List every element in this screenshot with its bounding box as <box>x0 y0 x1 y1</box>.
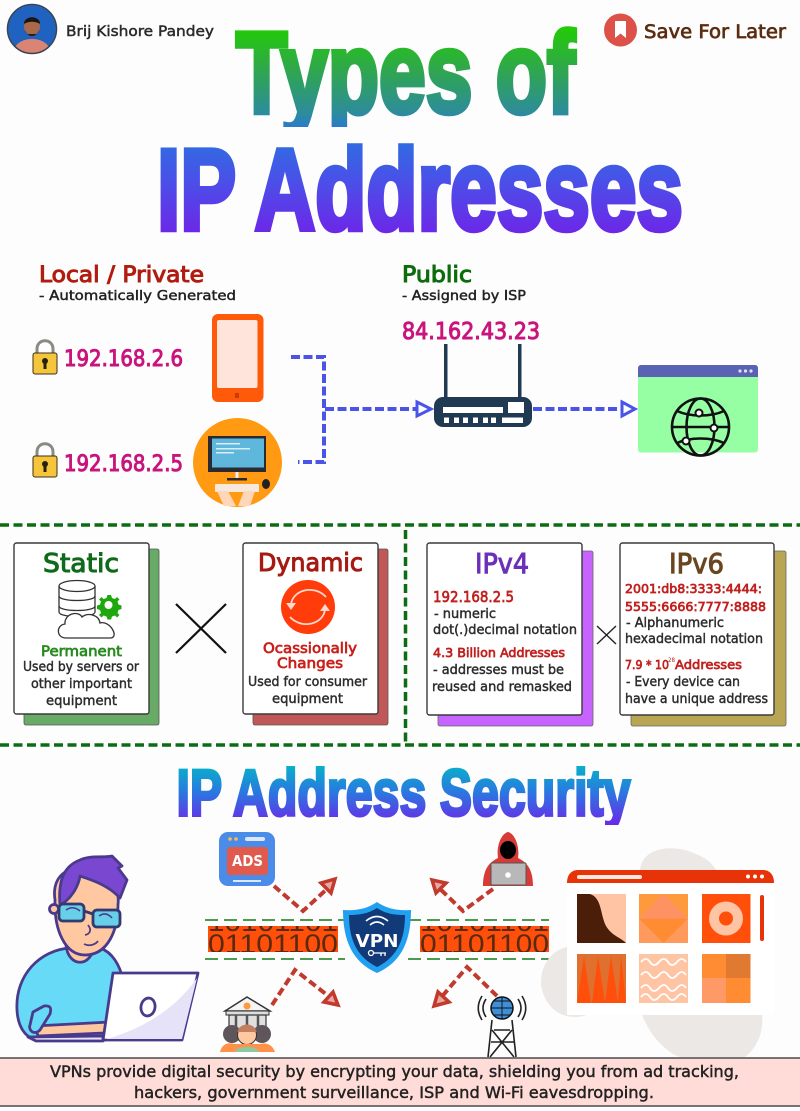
icon: lock two <box>33 444 57 477</box>
illustration: person with laptop <box>17 856 198 1041</box>
ipv6 count <box>625 657 742 672</box>
caption text: hackers, government surveillance, ISP and Wi-Fi eavesdropping. <box>134 1083 654 1102</box>
dynamic description: Used for consumer <box>248 675 368 690</box>
panel: static card <box>14 543 159 725</box>
icon: router <box>434 344 532 427</box>
dynamic description: equipment <box>272 692 343 707</box>
ipv6 note <box>625 675 768 707</box>
ipv6 example <box>625 581 766 614</box>
encrypted data stream left: 10101101 <box>208 907 338 937</box>
author avatar <box>8 5 56 53</box>
encrypted data stream right: 10101101 <box>420 907 549 937</box>
arrow: router to internet <box>533 407 620 411</box>
ipv6 example: 2001:db8:3333:4444: <box>625 581 762 596</box>
save icon <box>604 14 637 46</box>
ipv4 note: - addresses must be <box>433 663 564 678</box>
thumbnail: target <box>702 894 750 943</box>
main title <box>160 26 682 234</box>
avatar ring <box>8 4 56 54</box>
ipv6 count: 28 <box>668 657 675 664</box>
caption band <box>0 1058 800 1106</box>
panel: ipv6 card <box>620 543 786 726</box>
ipv4 count: 4.3 Billion Addresses <box>433 645 565 660</box>
local private note: - Automatically Generated <box>39 288 236 304</box>
icon: phone <box>212 314 264 402</box>
static heading: Static <box>43 549 119 579</box>
ipv4 notation: - numeric <box>434 607 496 622</box>
ipv6 notation <box>625 616 763 647</box>
author name: Brij Kishore Pandey <box>66 24 214 40</box>
encrypted data stream right: 01101100 <box>420 929 549 959</box>
caption text <box>50 1062 739 1102</box>
ipv6 note: have a unique address <box>625 692 768 707</box>
arrow: ads deflected <box>274 879 335 911</box>
permanent label: Permanent <box>41 644 123 660</box>
panel: dynamic card <box>243 543 388 725</box>
local private heading: Local / Private <box>39 263 204 288</box>
arrow: tower deflected <box>434 967 497 1006</box>
static description <box>23 660 140 709</box>
icon: vpn shield: VPN <box>356 931 398 952</box>
caption text: VPNs provide digital security by encrypting your data, shielding you from ad tracking, <box>50 1062 739 1081</box>
dynamic heading: Dynamic <box>258 548 363 577</box>
ipv6 notation: hexadecimal notation <box>625 632 763 647</box>
ipv6 notation: - Alphanumeric <box>626 616 724 631</box>
ipv6 heading: IPv6 <box>669 547 724 580</box>
panel: local private vs public <box>33 263 758 507</box>
thumbnail: quadrants <box>702 954 750 1003</box>
occasionally changes label: Changes <box>277 656 343 672</box>
ipv6 count: Addresses <box>675 657 742 672</box>
thumbnail: squiggles <box>639 954 688 1003</box>
encrypted data stream right <box>408 919 549 960</box>
arrow: government deflected <box>272 970 338 1005</box>
encrypted data stream left <box>205 919 345 960</box>
occasionally changes label <box>263 641 357 672</box>
occasionally changes label: Ocassionally <box>263 641 357 657</box>
icon: ads: ADS <box>232 852 263 870</box>
arrow: hacker deflected <box>432 880 493 911</box>
static description: equipment <box>46 694 117 709</box>
ipv4 note <box>432 663 572 695</box>
ipv6 count: 7.9 * 10 <box>625 657 669 672</box>
local ip computer: 192.168.2.5 <box>64 452 183 477</box>
arrow head: to router <box>417 402 431 416</box>
public ip: 84.162.43.23 <box>402 319 540 345</box>
ipv4 notation: dot(.)decimal notation <box>433 623 577 638</box>
save for later label: Save For Later <box>644 21 786 43</box>
public note: - Assigned by ISP <box>402 288 526 304</box>
thumbnail: spikes <box>577 954 626 1003</box>
icon: versus cross small <box>597 626 616 644</box>
dynamic description <box>248 675 368 707</box>
ipv6 example: 5555:6666:7777:8888 <box>625 599 766 614</box>
icon: versus cross large <box>176 604 226 653</box>
ipv4 notation <box>433 607 577 638</box>
icon: server cloud gear <box>58 580 122 638</box>
main title: Types of <box>236 10 576 138</box>
icon: lock one <box>33 341 57 374</box>
ipv4 example: 192.168.2.5 <box>433 588 514 606</box>
security heading: IP Address Security <box>176 756 631 830</box>
icon: computer <box>193 418 282 507</box>
icon: vpn shield <box>343 902 411 973</box>
encrypted data stream left: 01101100 <box>208 929 338 959</box>
thumbnail: wave <box>577 894 626 943</box>
illustration: cloud and browser panel <box>541 848 774 1057</box>
public heading: Public <box>402 263 472 288</box>
static description: Used by servers or <box>23 660 140 675</box>
icon: refresh circle <box>281 580 335 634</box>
ipv4 heading: IPv4 <box>475 547 529 580</box>
icon: hacker <box>483 832 533 886</box>
ipv6 note: - Every device can <box>626 675 740 690</box>
section dividers <box>0 525 800 745</box>
thumbnail: diamond <box>639 894 688 943</box>
icon: cell tower <box>478 996 526 1057</box>
icon: browser window with globe <box>638 365 758 456</box>
icon: ads <box>219 832 275 886</box>
ipv4 note: reused and remasked <box>432 680 572 695</box>
icon: government <box>220 997 275 1052</box>
local ip phone: 192.168.2.6 <box>64 347 183 372</box>
arrow head: to internet <box>622 402 635 416</box>
arrow: device connector <box>291 357 416 462</box>
panel: ipv4 card <box>427 543 593 726</box>
static description: other important <box>31 677 132 692</box>
